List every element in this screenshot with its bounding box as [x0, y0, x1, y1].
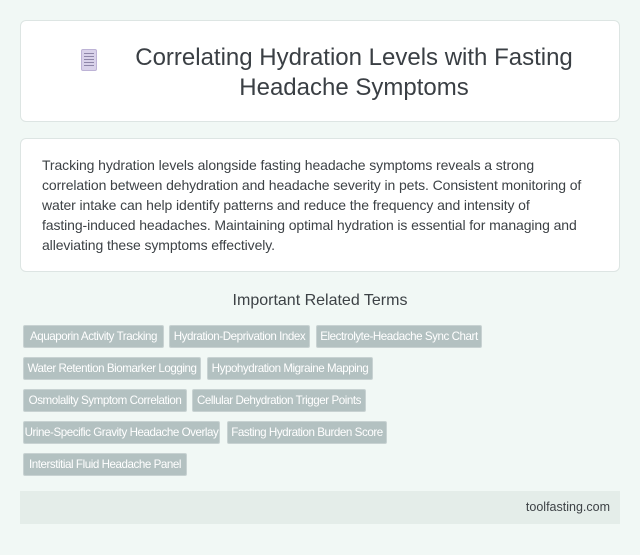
- tags: Aquaporin Activity Tracking: [30, 330, 157, 343]
- tags: Interstitial Fluid Headache Panel: [29, 458, 181, 471]
- summary text: alleviating these symptoms effectively.: [42, 237, 275, 253]
- tags: Fasting Hydration Burden Score: [231, 426, 383, 439]
- tags: Hydration-Deprivation Index: [174, 330, 305, 343]
- tags: Electrolyte-Headache Sync Chart: [320, 330, 478, 343]
- tags: Hypohydration Migraine Mapping: [212, 362, 368, 375]
- tags: Cellular Dehydration Trigger Points: [197, 394, 361, 407]
- summary text: water intake can help identify patterns and reduce the frequency and intensity of: [42, 197, 530, 213]
- footer: [20, 491, 620, 524]
- heading: related terms: Important Related Terms: [233, 292, 407, 309]
- tags: Water Retention Biomarker Logging: [27, 362, 197, 375]
- summary text: fasting-induced headaches. Maintaining optimal hydration is essential for managing and: [42, 217, 577, 233]
- title: [135, 44, 573, 101]
- icon: document: [81, 49, 97, 71]
- title: Headache Symptoms: [239, 74, 469, 101]
- tags: Osmolality Symptom Correlation: [29, 394, 181, 407]
- summary card: [20, 138, 620, 272]
- title: Correlating Hydration Levels with Fasting: [135, 44, 573, 71]
- tags: Urine-Specific Gravity Headache Overlay: [25, 426, 218, 439]
- footer text: toolfasting.com: [526, 500, 610, 514]
- header card: [20, 20, 620, 122]
- summary text: Tracking hydration levels alongside fasting headache symptoms reveals a strong: [42, 157, 534, 173]
- summary text: correlation between dehydration and headache severity in pets. Consistent monitoring of: [42, 177, 581, 193]
- summary text: [42, 157, 582, 253]
